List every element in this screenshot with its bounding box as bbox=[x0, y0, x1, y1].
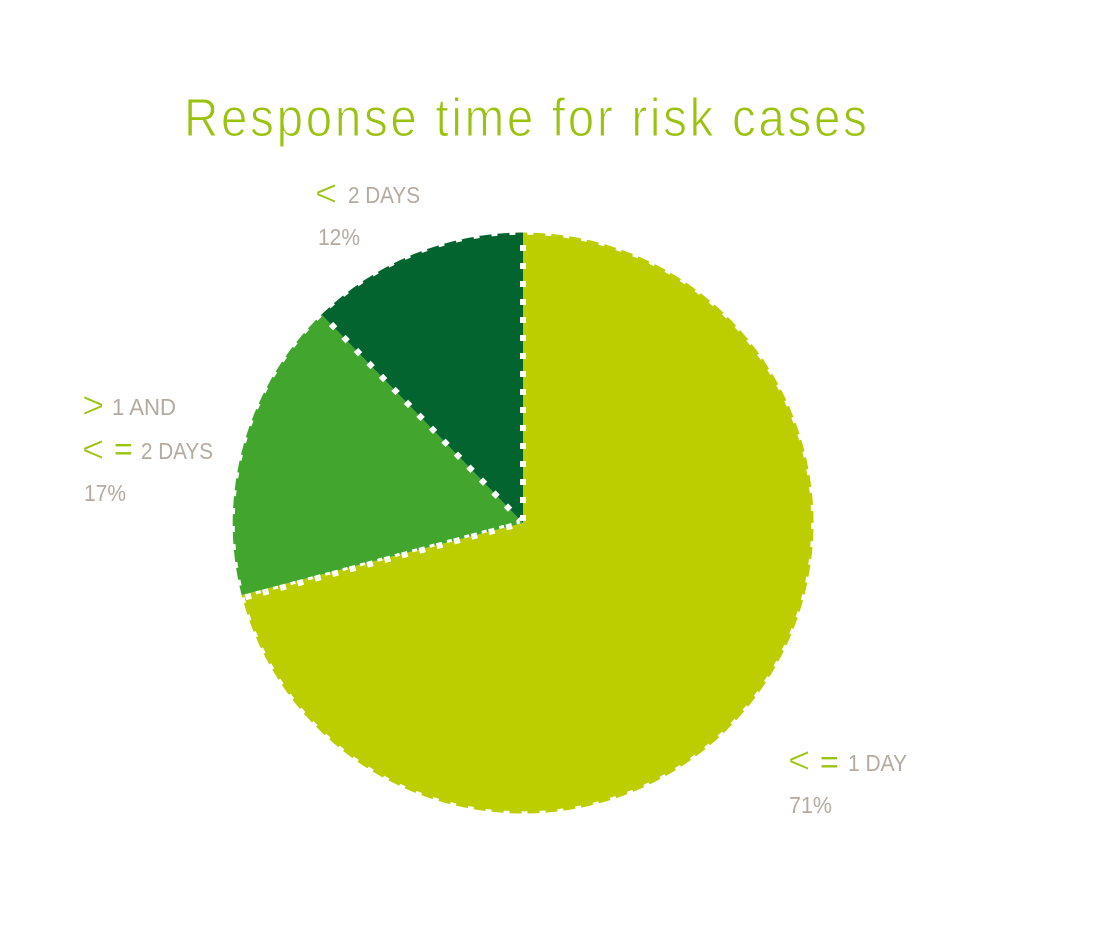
label: more than 1 and up to 2 days: = bbox=[114, 431, 133, 467]
slice: more than 1 and up to 2 days, 17% bbox=[233, 314, 523, 595]
label: less than 2 days: 12% bbox=[318, 224, 360, 250]
label: more than 1 and up to 2 days: 17% bbox=[84, 480, 126, 506]
slice: less than 2 days, 12% bbox=[322, 232, 523, 523]
title: Response time for risk cases bbox=[184, 87, 867, 148]
label: less than or equal to 1 day: < bbox=[788, 740, 810, 782]
label: more than 1 and up to 2 days: < bbox=[82, 429, 104, 471]
label: less than or equal to 1 day bbox=[788, 740, 907, 818]
label: more than 1 and up to 2 days: 1 AND bbox=[112, 394, 176, 420]
slice: less than or equal to 1 day, 71% bbox=[242, 232, 814, 813]
label: more than 1 and up to 2 days bbox=[82, 385, 213, 506]
label: less than 2 days bbox=[315, 173, 420, 250]
label: less than or equal to 1 day: 71% bbox=[789, 792, 832, 818]
label: less than 2 days: < bbox=[315, 173, 337, 215]
label: more than 1 and up to 2 days: > bbox=[82, 385, 104, 427]
label: less than or equal to 1 day: = bbox=[820, 744, 839, 780]
pie chart bbox=[232, 232, 814, 814]
label: less than 2 days: 2 DAYS bbox=[348, 182, 420, 208]
label: more than 1 and up to 2 days: 2 DAYS bbox=[141, 438, 213, 464]
label: less than or equal to 1 day: 1 DAY bbox=[848, 750, 907, 776]
